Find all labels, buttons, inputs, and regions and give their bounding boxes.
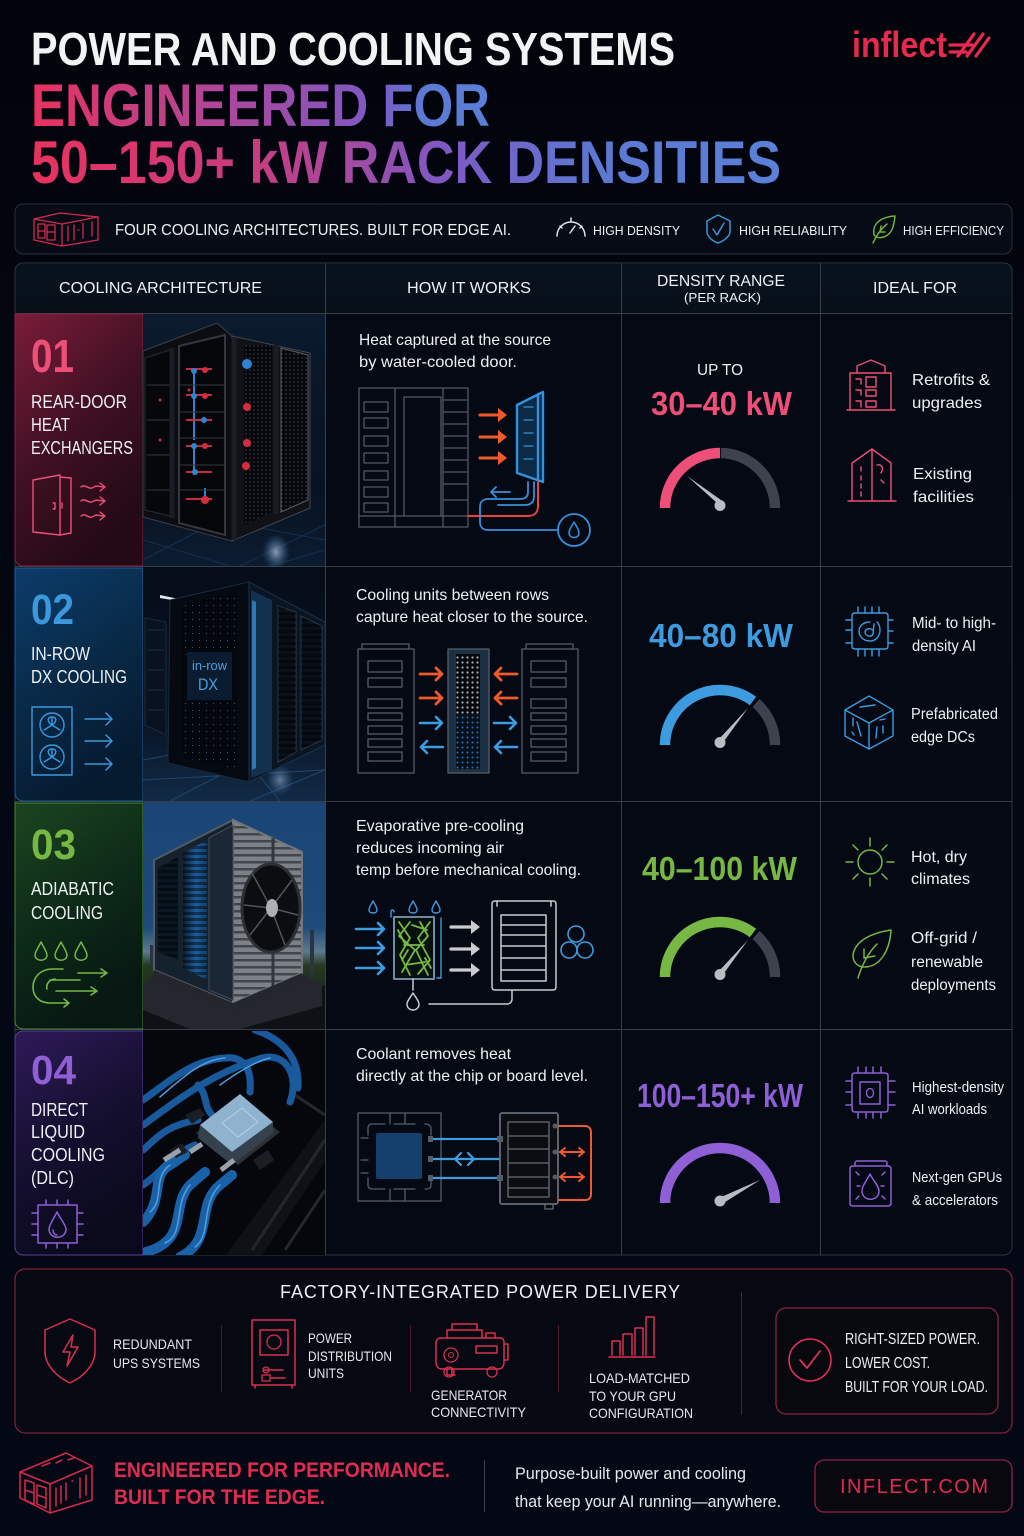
- distribution unit: [500, 1113, 558, 1204]
- number 03: 03: [31, 821, 76, 869]
- rack outline: [359, 388, 468, 527]
- density: up to 30-40 kW: 30–40 kW: [651, 385, 793, 422]
- text: hot dry: climates: [911, 871, 970, 888]
- diagram: water-cooled door: [359, 388, 590, 546]
- outflow arrows: [451, 927, 474, 970]
- panel: factory-integrated power delivery: [15, 1269, 1012, 1433]
- button: inflect.com: INFLECT.COM: [840, 1476, 988, 1498]
- board: [358, 1113, 441, 1201]
- panel: row 03 adiabatic cooling: [15, 803, 143, 1029]
- callout: right-sized power: LOWER COST.: [845, 1355, 930, 1372]
- item: UPS: [45, 1319, 200, 1383]
- how it works: row 04: directly at the chip or board level.: [356, 1068, 588, 1085]
- text: off-grid: deployments: [911, 977, 996, 994]
- image: direct liquid cooling plate: [143, 1031, 325, 1255]
- strip heading: FOUR COOLING ARCHITECTURES. BUILT FOR EDGE AI.: [115, 222, 511, 239]
- number 02: 02: [31, 586, 74, 634]
- item: generator: GENERATOR: [431, 1387, 507, 1403]
- badge: high density: [557, 218, 680, 238]
- density: up to 30-40 kW: UP TO: [697, 362, 743, 379]
- text: hot dry: Hot, dry: [911, 849, 967, 866]
- drain: [407, 979, 512, 1010]
- ideal for: row 04: [846, 1067, 1005, 1209]
- badge: high reliability: [707, 215, 847, 243]
- item: PDU: POWER: [308, 1330, 352, 1346]
- cooling unit: [492, 901, 556, 990]
- footer: that keep your AI running—anywhere.: [515, 1492, 781, 1511]
- diagram: evaporative pre-cooling: [356, 901, 593, 1010]
- how it works: row 02: capture heat closer to the source.: [356, 609, 588, 626]
- table header row: DENSITY RANGE: [657, 273, 785, 290]
- fan: [561, 926, 593, 958]
- density: 100-150+ kW: 100–150+ kW: [637, 1077, 804, 1114]
- text: hot dry: [911, 849, 970, 888]
- door exchanger: [517, 392, 543, 482]
- item: UPS: UPS SYSTEMS: [113, 1355, 200, 1371]
- gauge: [665, 922, 775, 980]
- text: next-gen GPUs: [912, 1170, 1002, 1209]
- icon: door: [33, 475, 71, 535]
- icon: prefabricated cube: [845, 696, 893, 749]
- item: PDU: [252, 1320, 392, 1388]
- how it works: row 02: Cooling units between rows: [356, 587, 549, 604]
- text: mid to high density: density AI: [912, 638, 976, 655]
- evaporative pad: [394, 917, 434, 979]
- title: ENGINEERED FOR: [31, 72, 490, 139]
- table header row: (PER RACK): [684, 290, 761, 305]
- diagram: in-row airflow: [358, 644, 578, 773]
- text: retrofits: Retrofits &: [912, 372, 990, 389]
- table frame: [15, 263, 1012, 1255]
- icon: liquid chip: [32, 1200, 83, 1248]
- coolant pipes: [468, 482, 538, 516]
- right rack: [522, 644, 578, 773]
- title: [31, 23, 781, 196]
- icon: water drops: [35, 942, 87, 960]
- panel: row 04 direct liquid cooling: [15, 1031, 143, 1255]
- how it works: row 03: reduces incoming air: [356, 840, 505, 857]
- how it works: row 01: Heat captured at the source: [359, 332, 551, 349]
- text: off-grid: renewable: [911, 954, 983, 971]
- text: existing: facilities: [913, 489, 974, 506]
- number 01: 01: [31, 330, 74, 382]
- icon: building retrofit: [847, 360, 895, 410]
- icon: AI chip: [846, 1067, 895, 1118]
- ideal for: row 03: [846, 838, 996, 994]
- icon: heat waves: [81, 483, 105, 520]
- name: DX COOLING: [31, 667, 127, 687]
- text: off-grid: Off-grid /: [911, 930, 978, 947]
- icon: airflow arrows: [85, 713, 112, 770]
- logo: inflect: inflect: [852, 24, 947, 65]
- heading: FACTORY-INTEGRATED POWER DELIVERY: [280, 1282, 680, 1302]
- item: load-matched: CONFIGURATION: [589, 1405, 693, 1421]
- gauge: [665, 690, 775, 748]
- tagline: ENGINEERED FOR PERFORMANCE.: [114, 1459, 450, 1482]
- how it works: row 04: [356, 1046, 588, 1085]
- icon: chip: [846, 607, 893, 656]
- arrows: [420, 668, 517, 704]
- name: IN-ROW: [31, 644, 90, 664]
- name: [31, 392, 133, 458]
- number 04: 04: [31, 1047, 76, 1093]
- icon: fan unit: [32, 707, 72, 775]
- water drops: [369, 901, 441, 978]
- badge: high reliability: HIGH RELIABILITY: [739, 223, 847, 238]
- density: up to 30-40 kW: [651, 362, 793, 511]
- image: rear-door rack: [143, 314, 325, 570]
- text: prefabricated: edge DCs: [911, 729, 975, 746]
- item: load-matched: [589, 1317, 693, 1421]
- text: next-gen GPUs: & accelerators: [912, 1193, 998, 1209]
- name: COOLING: [31, 1145, 105, 1165]
- density: 40-100 kW: 40–100 kW: [642, 850, 798, 887]
- label: in-row DX: in-row: [192, 659, 228, 673]
- text: existing: [913, 466, 974, 506]
- badge: high efficiency: HIGH EFFICIENCY: [903, 223, 1004, 238]
- button: inflect.com: [815, 1460, 1012, 1512]
- name: DIRECT: [31, 1100, 88, 1120]
- diagram: direct-to-chip loop: [358, 1113, 591, 1209]
- name: EXCHANGERS: [31, 438, 133, 458]
- density: 40-80 kW: 40–80 kW: [649, 617, 794, 654]
- icon: adiabatic airflow: [33, 969, 107, 1007]
- text: prefabricated: [911, 706, 998, 746]
- image: adiabatic unit: [143, 802, 325, 1029]
- name: REAR-DOOR: [31, 392, 127, 412]
- in-row unit: [448, 649, 489, 773]
- gauge: [665, 453, 775, 511]
- callout: right-sized power: [776, 1308, 998, 1414]
- item: load-matched: TO YOUR GPU: [589, 1388, 676, 1404]
- blue inflow arrows: [356, 923, 384, 974]
- table header row: COOLING ARCHITECTURE: [59, 280, 262, 297]
- name: [31, 879, 114, 923]
- text: mid to high density: Mid- to high-: [912, 615, 996, 632]
- badge: high efficiency: [873, 216, 1004, 243]
- how it works: row 04: Coolant removes heat: [356, 1046, 512, 1063]
- how it works: row 01: by water-cooled door.: [359, 354, 517, 371]
- icon: sun: [846, 838, 894, 886]
- title: POWER AND COOLING SYSTEMS: [31, 23, 675, 75]
- text: existing: Existing: [913, 466, 972, 483]
- text: retrofits: upgrades: [912, 395, 982, 412]
- how it works: row 03: [356, 818, 581, 879]
- text: prefabricated: Prefabricated: [911, 706, 998, 723]
- icon: existing facility: [848, 449, 896, 501]
- ideal for: row 02: [845, 607, 998, 749]
- footer: [20, 1453, 1012, 1513]
- table header row: [59, 273, 957, 305]
- text: highest density: [912, 1080, 1005, 1118]
- text: highest density: Highest-density: [912, 1080, 1005, 1096]
- heat arrows: [480, 415, 500, 458]
- gauge: [665, 1148, 775, 1206]
- item: generator: [431, 1324, 527, 1420]
- icon: GPU with drop: [850, 1161, 891, 1206]
- icon: container: [20, 1453, 92, 1513]
- text: next-gen GPUs: Next-gen GPUs: [912, 1170, 1002, 1186]
- image: in-row DX rack: DX: [198, 675, 218, 694]
- name: [31, 644, 127, 687]
- chip: [376, 1133, 422, 1179]
- text: mid to high density: [912, 615, 996, 655]
- how it works: row 01: [359, 332, 551, 371]
- name: ADIABATIC: [31, 879, 114, 899]
- callout: right-sized power: RIGHT-SIZED POWER.: [845, 1331, 980, 1348]
- footer: BUILT FOR THE EDGE.: [114, 1486, 325, 1509]
- text: off-grid: [911, 930, 996, 994]
- panel: row 01 rear-door heat exchangers: [15, 314, 143, 566]
- badge: high density: HIGH DENSITY: [593, 223, 680, 238]
- icon: leaf: [853, 930, 891, 978]
- item: PDU: UNITS: [308, 1365, 344, 1381]
- item: load-matched: LOAD-MATCHED: [589, 1370, 690, 1386]
- connectors: [428, 1124, 558, 1181]
- item: UPS: REDUNDANT: [113, 1336, 192, 1352]
- table header row: HOW IT WORKS: [407, 280, 531, 297]
- image: in-row DX rack: [143, 567, 325, 801]
- how it works: row 03: temp before mechanical cooling.: [356, 862, 581, 879]
- density: 40-80 kW: [649, 617, 794, 748]
- how it works: row 03: Evaporative pre-cooling: [356, 818, 524, 835]
- density: 100-150+ kW: [637, 1077, 804, 1206]
- name: LIQUID: [31, 1122, 85, 1142]
- item: PDU: DISTRIBUTION: [308, 1348, 392, 1364]
- panel: row 02 in-row DX cooling: [15, 568, 143, 801]
- left rack: [358, 644, 414, 773]
- text: highest density: AI workloads: [912, 1102, 987, 1118]
- hot return loop: [559, 1126, 591, 1200]
- how it works: row 02: [356, 587, 588, 626]
- item: generator: CONNECTIVITY: [431, 1404, 527, 1420]
- title: 50–150+ kW RACK DENSITIES: [31, 129, 781, 196]
- name: (DLC): [31, 1168, 74, 1188]
- ideal for: row 01: [847, 360, 990, 506]
- supporting line: Purpose-built power and cooling: [515, 1464, 746, 1483]
- icon: container: [34, 213, 98, 246]
- text: retrofits: [912, 372, 990, 412]
- strip: four cooling architectures: [15, 204, 1012, 254]
- coolant lines: [431, 1139, 502, 1178]
- density: 40-100 kW: [642, 850, 798, 980]
- name: COOLING: [31, 903, 103, 923]
- name: HEAT: [31, 415, 70, 435]
- name: [31, 1100, 105, 1188]
- table header row: IDEAL FOR: [873, 280, 957, 297]
